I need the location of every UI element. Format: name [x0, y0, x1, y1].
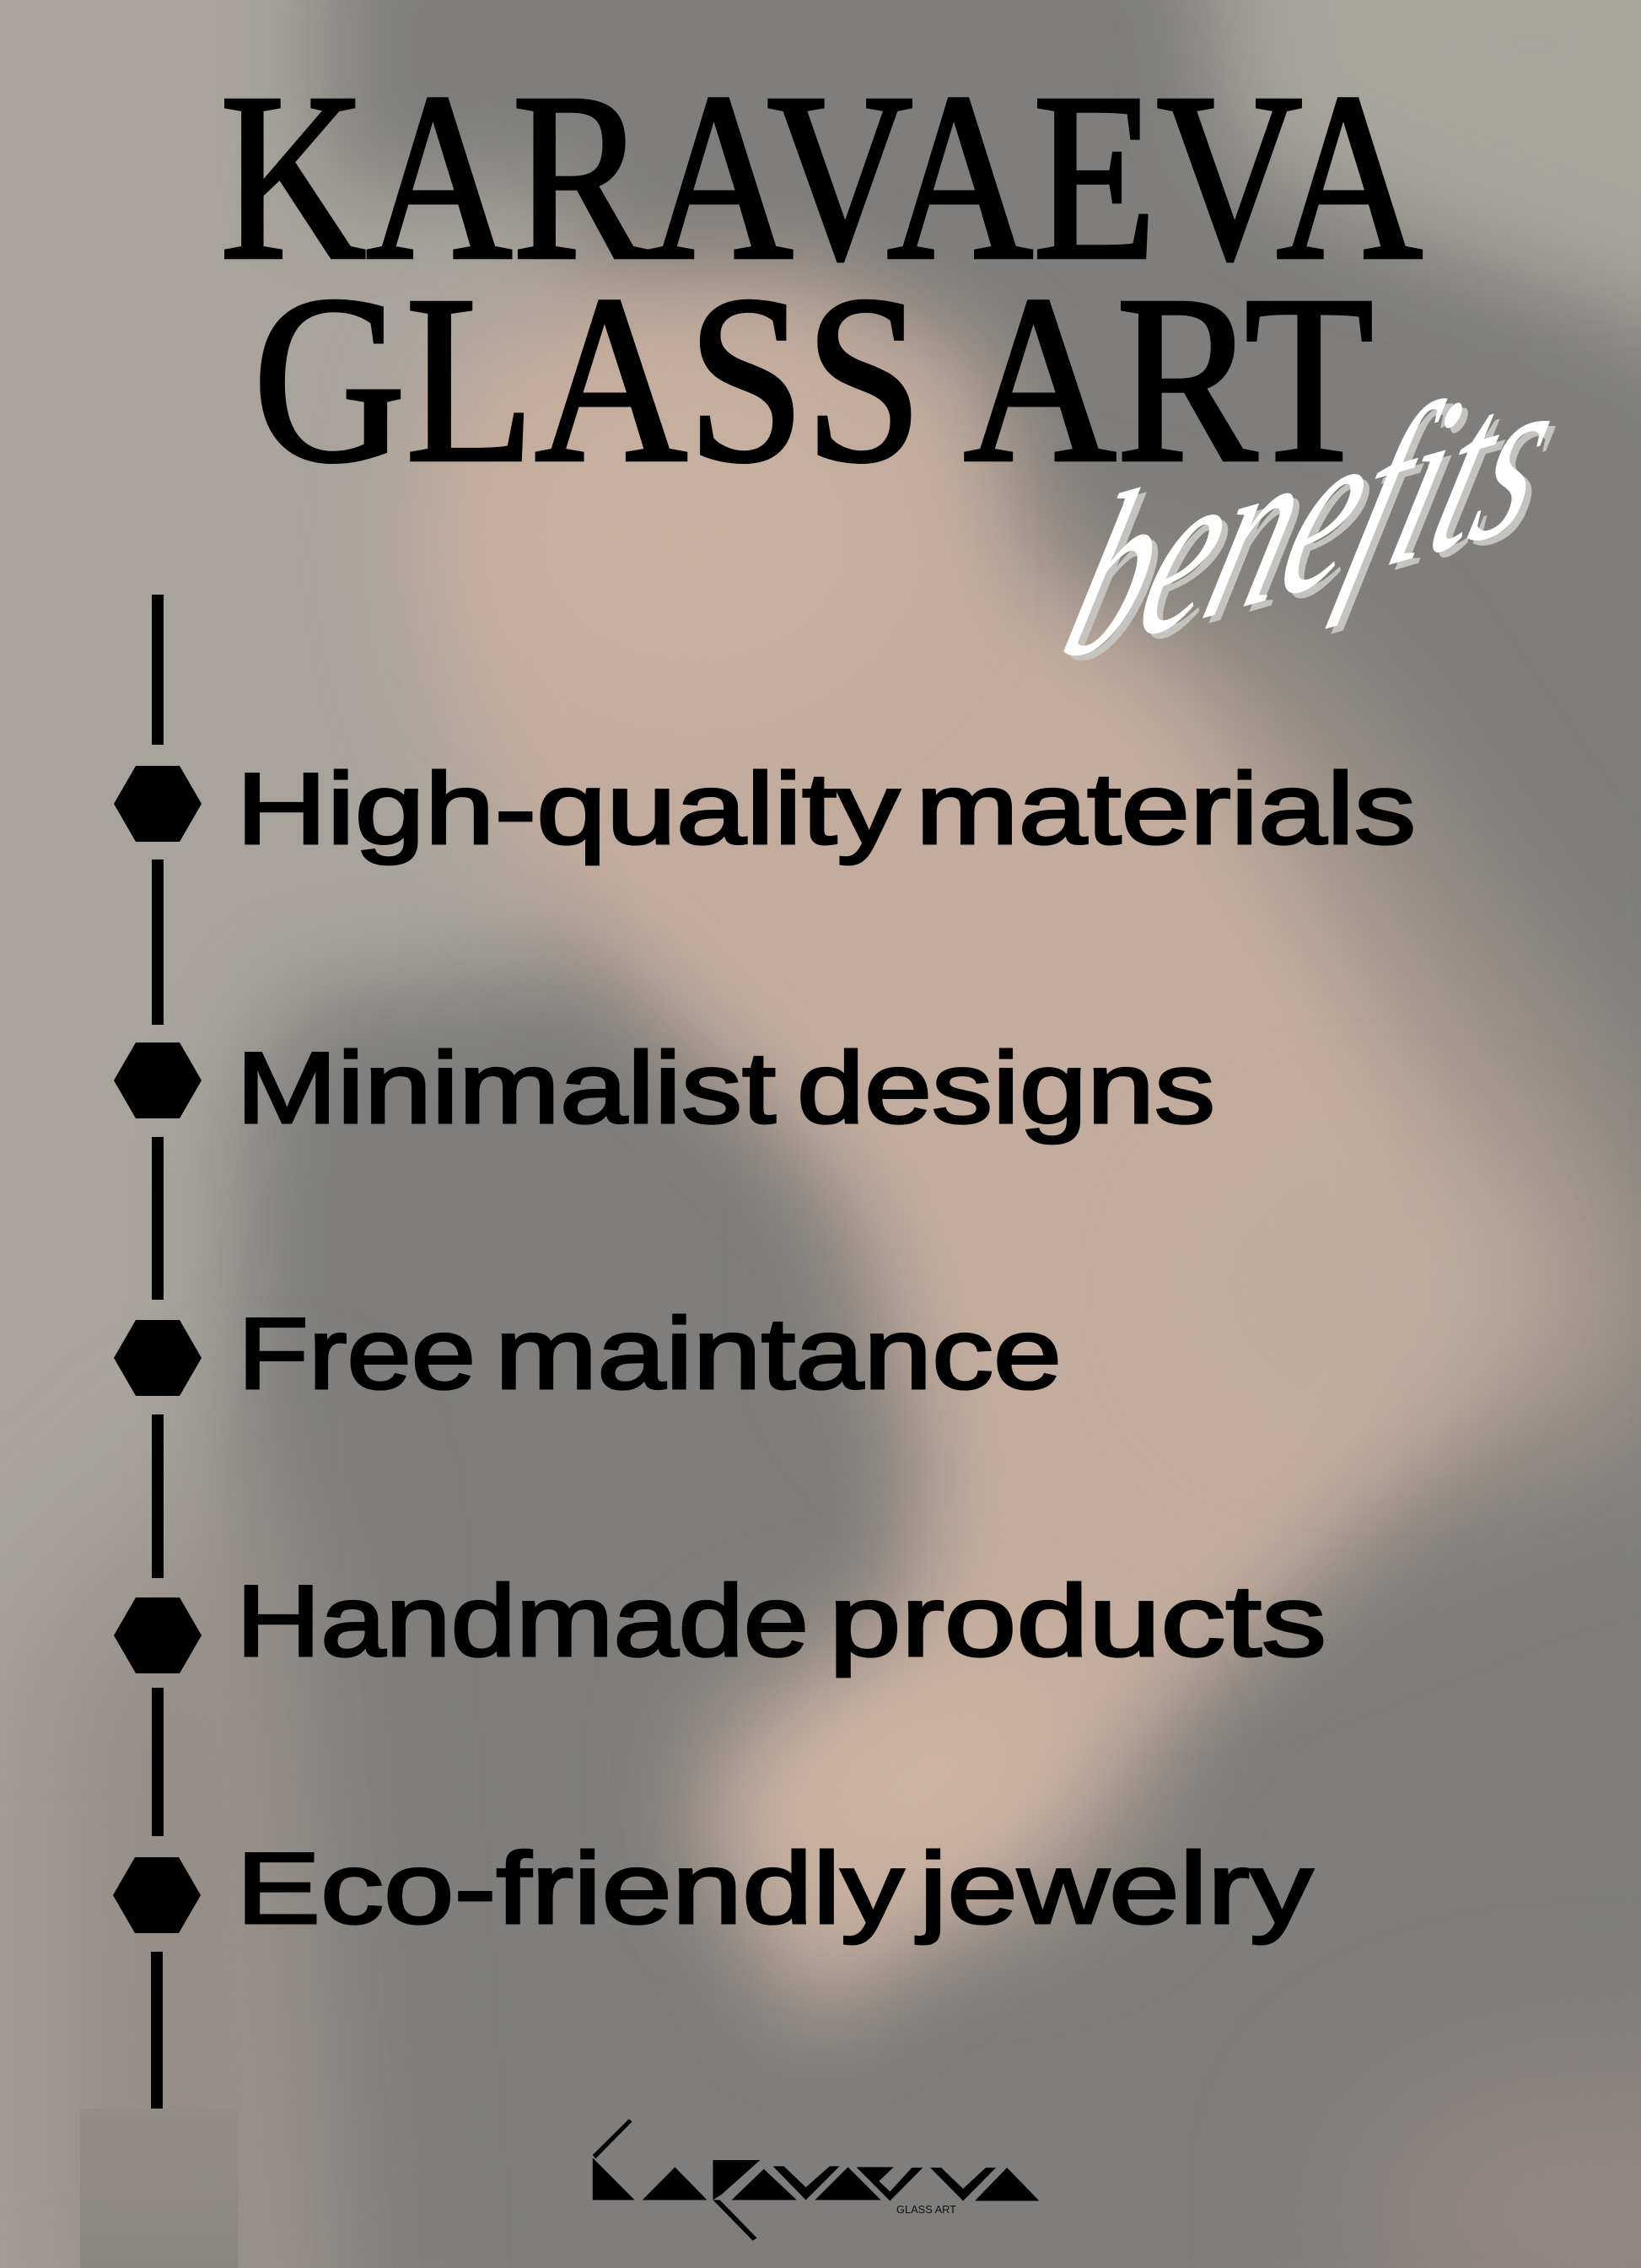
- benefit 4: Handmade products: Handmade: [236, 1565, 809, 1678]
- title: KARAVAEVA GLASS ART: [220, 45, 1423, 512]
- title: KARAVAEVA GLASS ART: KARAVAEVA: [220, 45, 1423, 310]
- benefit 5: Eco-friendly jewelry: Eco-friendly: [236, 1832, 904, 1945]
- logo: Karavaeva Glass Art: [593, 2119, 1039, 2241]
- benefit 3: Free maintance: maintance: [495, 1297, 1062, 1410]
- benefit 2: Minimalist designs: designs: [797, 1032, 1215, 1145]
- title: KARAVAEVA GLASS ART: GLASS ART: [253, 247, 1374, 512]
- benefit 5: Eco-friendly jewelry: [113, 1832, 1313, 1945]
- benefit 2: Minimalist designs: Minimalist: [236, 1032, 776, 1145]
- benefit 2: Minimalist designs: [114, 1032, 1215, 1145]
- timeline: vertical line segments: [151, 595, 164, 2109]
- benefit 3: Free maintance: Free: [238, 1297, 476, 1410]
- benefit 5: Eco-friendly jewelry: jewelry: [916, 1832, 1313, 1945]
- benefit 1: High-quality materials: materials: [916, 752, 1416, 865]
- benefit 1: High-quality materials: High-quality: [236, 752, 900, 865]
- benefit 1: High-quality materials: [114, 752, 1416, 865]
- benefit 3: Free maintance: [114, 1297, 1062, 1410]
- logo: Karavaeva Glass Art: GLASS ART: [896, 2203, 956, 2216]
- benefit 4: Handmade products: [114, 1565, 1326, 1678]
- benefit 4: Handmade products: products: [829, 1565, 1326, 1678]
- background patch: bottom-left rectangle: [80, 2126, 238, 2268]
